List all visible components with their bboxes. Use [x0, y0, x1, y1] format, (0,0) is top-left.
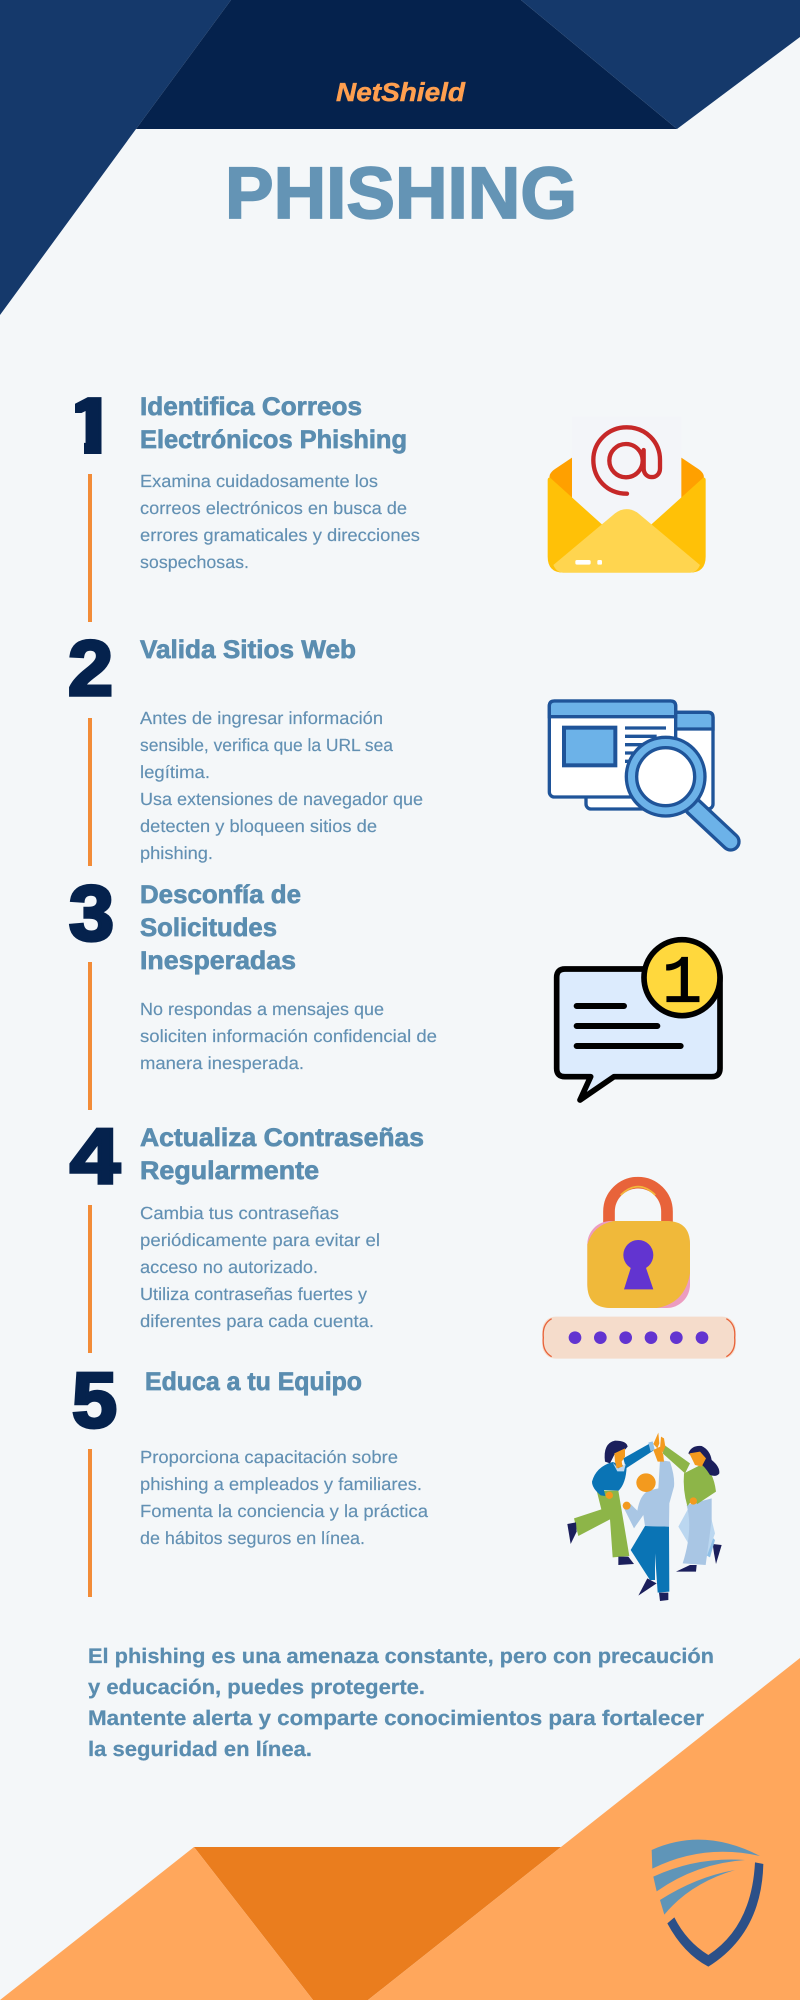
title: PHISHING [225, 153, 577, 234]
step 1 number: 1 [65, 382, 119, 470]
step 4 heading: Actualiza Contraseñas [140, 1124, 424, 1152]
closing message: Mantente alerta y comparte conocimientos para fortalecer [88, 1707, 704, 1730]
closing message: y educación, puedes protegerte. [88, 1676, 425, 1699]
step 2 text [140, 708, 423, 863]
step 5 text [140, 1447, 428, 1548]
step 4 heading: Regularmente [140, 1157, 319, 1185]
step 5 text: Fomenta la conciencia y la práctica [140, 1501, 428, 1521]
step 3 heading [140, 881, 301, 975]
step 3 number: 3 [69, 869, 114, 957]
step 2 [68, 624, 731, 866]
closing message: El phishing es una amenaza constante, pero con precaución [88, 1645, 714, 1668]
closing message: la seguridad en línea. [88, 1738, 312, 1761]
step 4 number: 4 [70, 1112, 120, 1200]
step 2 text: detecten y bloqueen sitios de [140, 816, 377, 836]
icon: envelope with at sign [548, 417, 706, 573]
step 3 text: No respondas a mensajes que [140, 999, 384, 1019]
step 3 heading: Solicitudes [140, 914, 277, 942]
step 3 [69, 869, 720, 1110]
step 1 connector line [88, 474, 92, 622]
step 3 text: soliciten información confidencial de [140, 1026, 437, 1046]
footer shapes [0, 1658, 800, 2000]
step 4 text: Utiliza contraseñas fuertes y [140, 1284, 367, 1304]
step 2 text: Usa extensiones de navegador que [140, 789, 423, 809]
icon: team high five illustration [567, 1433, 722, 1601]
step 3 connector line [88, 962, 92, 1110]
icon: shield logo [652, 1840, 763, 1967]
step 3 heading: Inesperadas [140, 947, 296, 975]
step 3 text: manera inesperada. [140, 1053, 304, 1073]
icon: padlock with password field [542, 1183, 736, 1359]
step 4 text: acceso no autorizado. [140, 1257, 318, 1277]
step 2 text: Antes de ingresar información [140, 708, 383, 728]
closing message [88, 1645, 714, 1761]
step 1 heading: Identifica Correos [140, 393, 362, 421]
step 5 text: de hábitos seguros en línea. [140, 1528, 365, 1548]
step 5 text: phishing a empleados y familiares. [140, 1474, 422, 1494]
step 4 text [140, 1203, 380, 1331]
step 2 text: sensible, verifica que la URL sea [140, 735, 393, 755]
step 1 text: correos electrónicos en busca de [140, 498, 407, 518]
step 1 text: Examina cuidadosamente los [140, 471, 378, 491]
step 1 heading [140, 393, 407, 454]
step 4 [70, 1112, 736, 1359]
step 1 text: sospechosas. [140, 552, 249, 572]
step 3 heading: Desconfía de [140, 881, 301, 909]
step 1 [65, 382, 706, 622]
step 4 text: periódicamente para evitar el [140, 1230, 380, 1250]
step 2 connector line [88, 718, 92, 866]
step 4 heading [140, 1124, 424, 1185]
step 5 heading: Educa a tu Equipo [145, 1368, 362, 1396]
step 3 text [140, 999, 437, 1073]
icon: message bubble with notification badge: 1 [662, 946, 702, 1022]
step 2 heading: Valida Sitios Web [140, 636, 356, 664]
step 2 text: phishing. [140, 843, 213, 863]
icon: message bubble with notification badge [557, 940, 720, 1100]
step 5 number: 5 [72, 1356, 117, 1444]
step 4 text: diferentes para cada cuenta. [140, 1311, 374, 1331]
icon: browser windows with magnifier [549, 701, 731, 842]
header banner shapes [0, 0, 800, 315]
step 4 connector line [88, 1205, 92, 1353]
step 5 text: Proporciona capacitación sobre [140, 1447, 398, 1467]
step 5 [72, 1356, 722, 1601]
step 1 heading: Electrónicos Phishing [140, 426, 407, 454]
step 1 text [140, 471, 420, 572]
step 2 number: 2 [68, 624, 113, 712]
step 1 text: errores gramaticales y direcciones [140, 525, 420, 545]
step 5 connector line [88, 1449, 92, 1597]
brand name: NetShield [336, 77, 466, 107]
step 4 text: Cambia tus contraseñas [140, 1203, 339, 1223]
step 2 text: legítima. [140, 762, 210, 782]
